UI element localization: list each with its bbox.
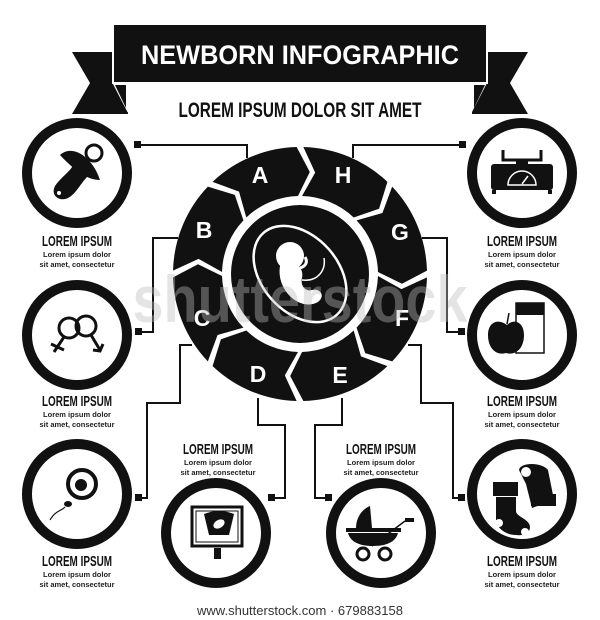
footer url: www.shutterstock.com · 679883158 xyxy=(196,603,403,618)
panel: ultrasound monitor xyxy=(166,483,266,583)
panel: stroller xyxy=(331,483,431,583)
connectors xyxy=(138,145,462,498)
text: label 6: Lorem ipsum dolor xyxy=(488,570,556,579)
text: label 6: sit amet, consectetur xyxy=(484,580,560,589)
text: label 6 xyxy=(484,553,560,589)
text: label 3: LOREM IPSUM xyxy=(42,553,112,570)
text: label stroller xyxy=(343,441,419,477)
text: label ultrasound xyxy=(180,441,256,477)
text: label 2: LOREM IPSUM xyxy=(42,393,112,410)
watermark: shutterstock xyxy=(132,262,468,336)
ring of segments A-H: B xyxy=(196,217,212,243)
panel: egg and sperm xyxy=(27,444,127,544)
text: label ultrasound: LOREM IPSUM xyxy=(183,441,253,458)
ring of segments A-H: G xyxy=(391,219,409,245)
text: label 5 xyxy=(484,393,560,429)
text: label 1 xyxy=(39,233,115,269)
text: label ultrasound: sit amet, consectetur xyxy=(180,468,256,477)
text: label 6: LOREM IPSUM xyxy=(487,553,557,570)
text: label 3: sit amet, consectetur xyxy=(39,580,115,589)
text: label 1: Lorem ipsum dolor xyxy=(43,250,111,259)
title banner: NEWBORN INFOGRAPHIC xyxy=(141,40,459,70)
text: label 1: LOREM IPSUM xyxy=(42,233,112,250)
text: label 5: LOREM IPSUM xyxy=(487,393,557,410)
text: label 4 xyxy=(484,233,560,269)
text: label 4: Lorem ipsum dolor xyxy=(488,250,556,259)
text: label 3 xyxy=(39,553,115,589)
ring of segments A-H xyxy=(164,138,436,410)
text: label 1: sit amet, consectetur xyxy=(39,260,115,269)
panel: socks xyxy=(472,444,572,544)
title banner xyxy=(72,24,528,114)
text: label 2: sit amet, consectetur xyxy=(39,420,115,429)
subtitle: LOREM IPSUM DOLOR SIT AMET xyxy=(178,99,422,122)
panel: pacifier xyxy=(27,123,127,223)
ring of segments A-H: F xyxy=(395,305,409,331)
ring of segments A-H: D xyxy=(250,361,266,387)
text: label stroller: Lorem ipsum dolor xyxy=(347,458,415,467)
text: label stroller: LOREM IPSUM xyxy=(346,441,416,458)
text: label 4: LOREM IPSUM xyxy=(487,233,557,250)
panel: apple and milk xyxy=(472,285,572,385)
text: label 5: sit amet, consectetur xyxy=(484,420,560,429)
text: label stroller: sit amet, consectetur xyxy=(343,468,419,477)
ring of segments A-H: C xyxy=(194,305,210,331)
ring of segments A-H: A xyxy=(252,162,268,188)
ring of segments A-H: H xyxy=(335,162,351,188)
text: label 2 xyxy=(39,393,115,429)
center disc with fetus xyxy=(231,205,369,343)
text: label 3: Lorem ipsum dolor xyxy=(43,570,111,579)
text: label 2: Lorem ipsum dolor xyxy=(43,410,111,419)
text: label 5: Lorem ipsum dolor xyxy=(488,410,556,419)
ring of segments A-H: E xyxy=(332,362,348,388)
text: label 4: sit amet, consectetur xyxy=(484,260,560,269)
panel: scale xyxy=(472,123,572,223)
text: label ultrasound: Lorem ipsum dolor xyxy=(184,458,252,467)
panel: gender symbols xyxy=(27,285,127,385)
